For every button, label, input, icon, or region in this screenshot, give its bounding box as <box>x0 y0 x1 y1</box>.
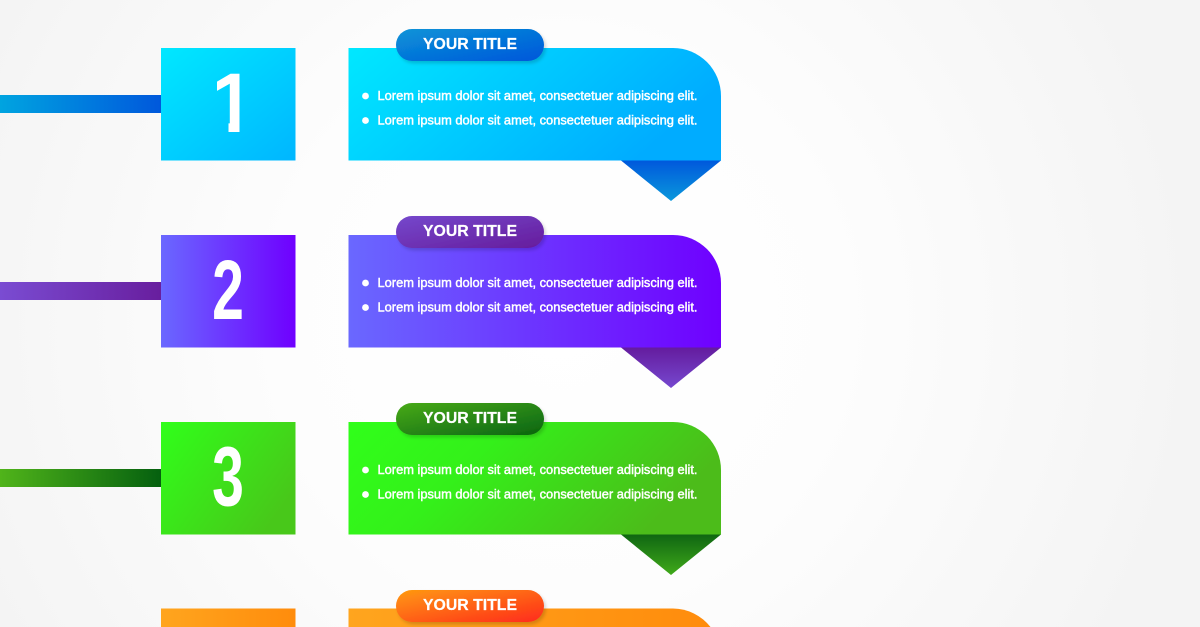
bullet list 1: Lorem ipsum dolor sit amet, consectetuer adipiscing elit. <box>378 112 698 128</box>
connector bar 2 <box>0 282 161 300</box>
fold arrow 2 <box>621 348 721 388</box>
number box 1: 1 <box>208 56 260 150</box>
number box 3: 3 <box>212 431 244 524</box>
fold arrow 1 <box>621 160 721 201</box>
fold arrow 3 <box>621 534 721 575</box>
title pill 4: YOUR TITLE <box>423 597 517 614</box>
title pill 2 <box>396 216 544 248</box>
bullet list 3: Lorem ipsum dolor sit amet, consectetuer adipiscing elit. <box>378 462 698 477</box>
title pill 4 <box>396 590 544 622</box>
number box 2 <box>161 235 296 348</box>
bullet list 3: Lorem ipsum dolor sit amet, consectetuer adipiscing elit. <box>378 486 698 502</box>
bullet list 2: Lorem ipsum dolor sit amet, consectetuer adipiscing elit. <box>378 275 698 290</box>
content panel 3 <box>348 403 721 575</box>
number box 1 <box>161 48 296 160</box>
content panel 4 <box>348 590 710 627</box>
title pill 2: YOUR TITLE <box>423 223 517 240</box>
bullet list 1: Lorem ipsum dolor sit amet, consectetuer adipiscing elit. <box>378 88 698 103</box>
number box 2: 2 <box>212 244 244 338</box>
title pill 1 <box>396 29 544 61</box>
title pill 1: YOUR TITLE <box>423 36 517 53</box>
row 4 <box>161 590 710 627</box>
content panel 1 <box>348 29 721 201</box>
number box 4 <box>161 608 296 627</box>
row 1 <box>0 29 721 201</box>
title pill 3 <box>396 403 544 435</box>
bullet list 3 <box>362 462 698 502</box>
content panel 2 <box>348 216 721 388</box>
connector bar 1 <box>0 95 161 113</box>
bullet list 2: Lorem ipsum dolor sit amet, consectetuer adipiscing elit. <box>378 300 698 314</box>
row 3 <box>0 403 721 575</box>
bullet list 2 <box>362 275 698 314</box>
connector bar 3 <box>0 469 161 487</box>
title pill 3: YOUR TITLE <box>423 410 517 427</box>
bullet list 1 <box>362 88 698 128</box>
row 2 <box>0 216 721 388</box>
number box 3 <box>161 422 296 534</box>
